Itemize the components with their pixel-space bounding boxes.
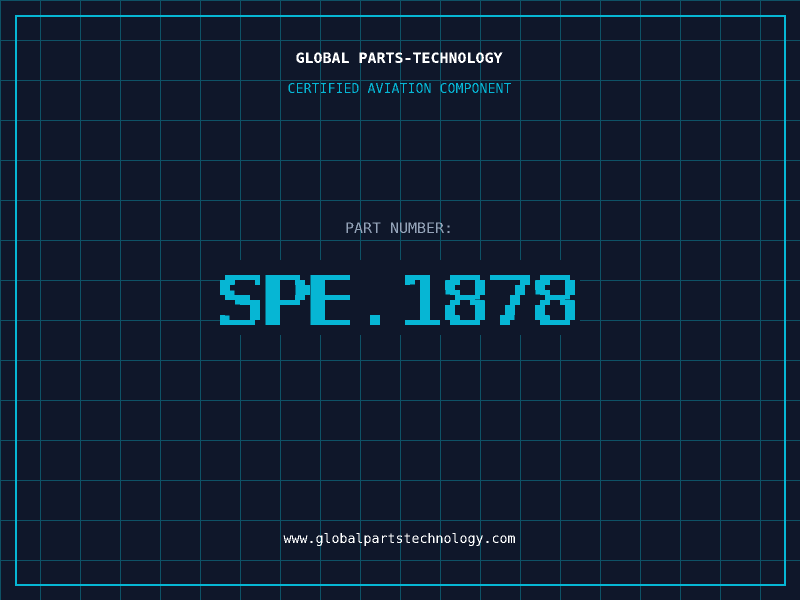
part number label: PART NUMBER:: [345, 221, 453, 237]
subtitle: CERTIFIED AVIATION COMPONENT: [288, 81, 512, 97]
part number value: SPE.1878: [215, 262, 576, 342]
website url: www.globalpartstechnology.com: [284, 532, 516, 547]
part number backing panel: [220, 260, 580, 335]
title: GLOBAL PARTS-TECHNOLOGY: [296, 51, 503, 67]
